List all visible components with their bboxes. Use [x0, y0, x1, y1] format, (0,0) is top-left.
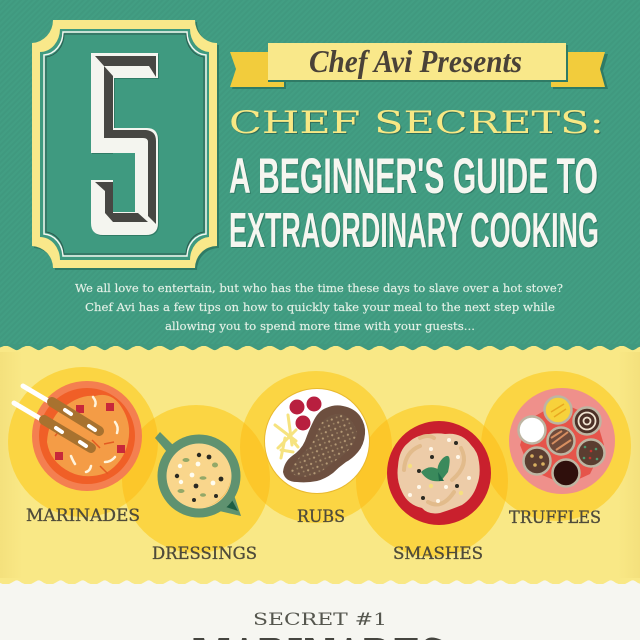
ribbon shape — [230, 43, 608, 89]
halo circles — [8, 367, 631, 557]
panel: white content area — [0, 578, 640, 640]
panel: yellow categories band — [0, 344, 640, 584]
banner: Chef Avi Presents — [230, 43, 608, 89]
intro text block: Chef Avi has a few tips on how to quickly take your meal to the next step while — [85, 300, 555, 314]
dish: dressings bowl — [155, 432, 241, 518]
title line: Chef Secrets: CHEF SECRETS: — [229, 105, 604, 141]
numeral 5 — [91, 53, 158, 235]
intro text block — [75, 281, 563, 333]
label: truffles: TRUFFLES — [509, 508, 601, 528]
intro text block: allowing you to spend more time with your guests... — [165, 319, 475, 333]
dish: marinades bowl with chopsticks — [14, 381, 142, 491]
badge frame — [32, 20, 219, 270]
label: marinades: MARINADES — [26, 506, 140, 526]
title: main heading — [229, 105, 604, 258]
label: rubs: RUBS — [297, 507, 345, 527]
badge: framed number 5 — [32, 20, 219, 270]
banner text: Chef Avi Presents — [309, 43, 522, 79]
panel: green header background — [0, 0, 640, 352]
dish: smashes hummus bowl — [387, 421, 491, 525]
label: smashes: SMASHES — [393, 544, 483, 564]
dish: truffles platter — [509, 388, 615, 494]
intro text block: We all love to entertain, but who has the time these days to slave over a hot stove? — [75, 281, 563, 295]
dish: rubs plate with meat — [264, 388, 370, 494]
heading: secret number: SECRET #1 — [253, 610, 387, 630]
label: dressings: DRESSINGS — [152, 544, 257, 564]
halo overlaps — [122, 418, 508, 508]
